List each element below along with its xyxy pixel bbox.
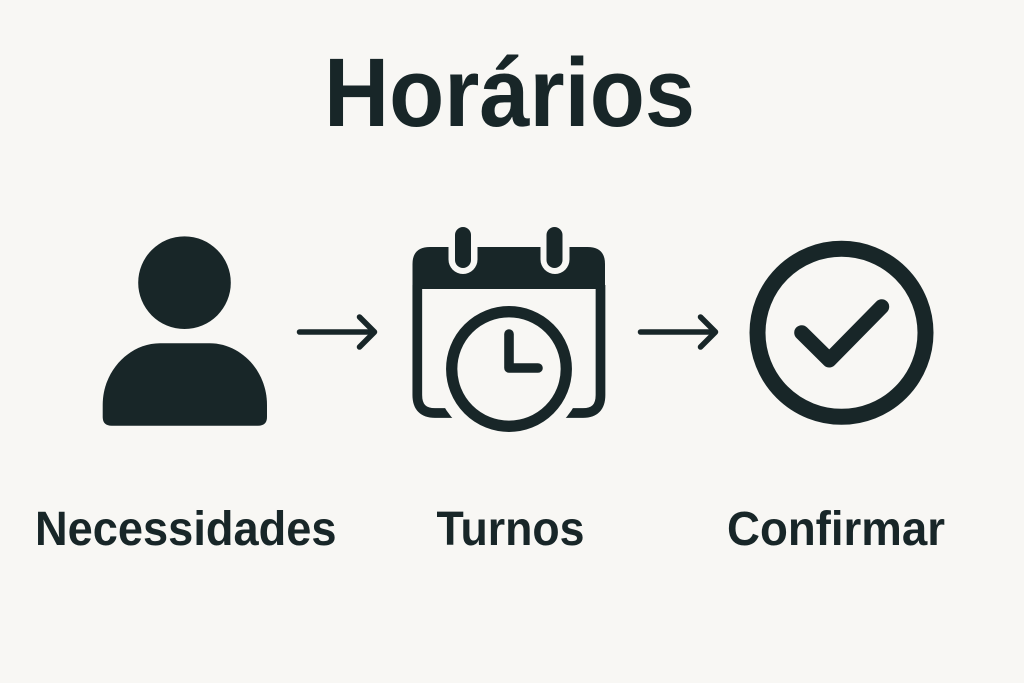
icon: check circle [758, 249, 926, 417]
label: Turnos: Turnos [436, 503, 584, 556]
label: Confirmar: Confirmar [727, 503, 945, 556]
arrow: needs to shifts [300, 317, 374, 347]
arrow: shifts to confirm [640, 317, 716, 347]
title: Horários [324, 38, 695, 147]
icon: person [103, 236, 267, 426]
icon: calendar with clock [412, 220, 605, 444]
label: Necessidades: Necessidades [35, 503, 336, 556]
